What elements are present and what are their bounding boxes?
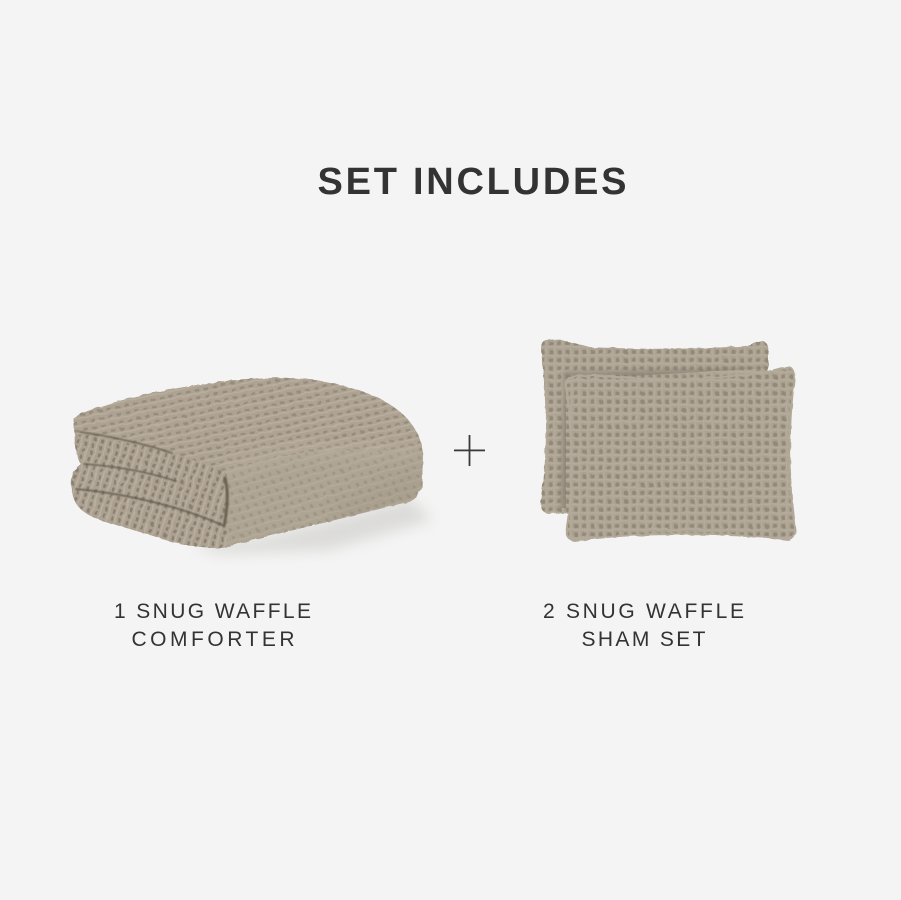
comforter front face <box>222 449 423 548</box>
label: shams: 2 SNUG WAFFLE <box>543 600 744 623</box>
comforter base silhouette <box>71 378 423 548</box>
label: shams: SHAM SET <box>582 628 706 651</box>
comforter illustration <box>71 378 432 554</box>
fold creases <box>76 432 227 526</box>
shams illustration <box>541 340 795 541</box>
label: comforter: COMFORTER <box>132 628 294 651</box>
comforter lower fold <box>73 490 228 548</box>
comforter middle fold <box>72 464 226 526</box>
front pillow <box>566 367 795 541</box>
comforter upper fold <box>75 434 228 500</box>
plus sign <box>454 435 485 466</box>
comforter soft shading <box>225 449 430 525</box>
back pillow shading <box>559 367 764 508</box>
label: comforter <box>114 600 311 651</box>
label: shams <box>543 600 744 651</box>
back pillow <box>541 340 768 514</box>
title: SET INCLUDES <box>318 161 626 203</box>
comforter shadow <box>190 498 432 554</box>
comforter top face <box>74 378 423 472</box>
label: comforter: 1 SNUG WAFFLE <box>114 600 311 623</box>
